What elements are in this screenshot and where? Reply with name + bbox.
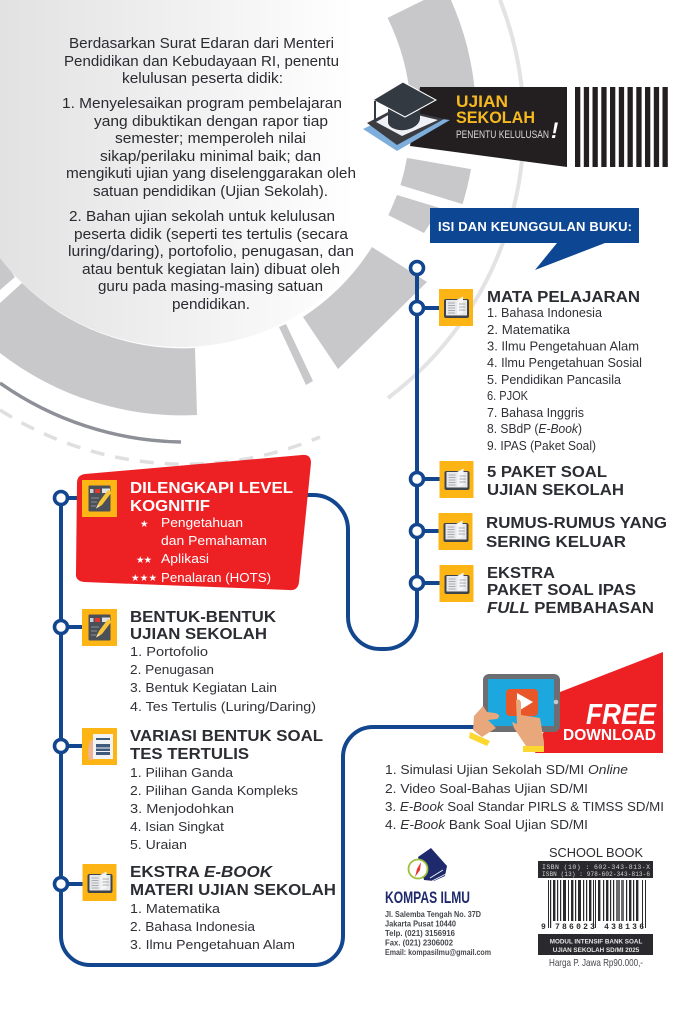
- list: 5. Uraian: [130, 837, 187, 852]
- cognitive level list: Aplikasi: [161, 551, 209, 566]
- cognitive level list: ★★: [136, 555, 152, 566]
- list: 1. Matematika: [130, 901, 221, 916]
- subject list: 5. Pendidikan Pancasila: [487, 372, 622, 387]
- timeline nodes: [54, 262, 424, 890]
- inner disc: [0, 0, 410, 347]
- intro text block: kelulusan peserta didik:: [122, 71, 283, 87]
- heading: FULL PEMBAHASAN: [487, 600, 654, 617]
- cognitive level list: [131, 515, 271, 585]
- subject list: 3. Ilmu Pengetahuan Alam: [487, 338, 639, 354]
- intro text block: satuan pendidikan (Ujian Sekolah).: [93, 184, 328, 200]
- exclamation mark: !: [551, 118, 558, 143]
- publisher address: [385, 910, 491, 957]
- heading: [130, 864, 336, 899]
- heading: PAKET SOAL IPAS: [487, 582, 636, 599]
- icon: book: [439, 289, 473, 326]
- intro text block: [62, 36, 356, 313]
- intro text block: mengikuti ujian yang diselenggarakan oleh: [66, 166, 356, 182]
- intro text block: atau bentuk kegiatan lain) dibuat oleh: [82, 262, 340, 278]
- tagline: PENENTU KELULUSAN: [456, 129, 549, 141]
- list: free download contents: 3. E-Book Soal Standar PIRLS & TIMSS SD/MI: [385, 799, 664, 814]
- connector stubs: [61, 308, 440, 884]
- cognitive level list: ★★★: [131, 573, 157, 584]
- connector line: left and bottom: [61, 498, 490, 965]
- intro text block: Pendidikan dan Kebudayaan RI, penentu: [64, 54, 339, 70]
- intro text block: guru pada masing-masing satuan: [98, 279, 323, 295]
- icon: pencil document: [82, 609, 117, 646]
- heading: MATA PELAJARAN: [487, 289, 640, 306]
- heading: TES TERTULIS: [130, 746, 249, 763]
- banner: ujian sekolah: [363, 82, 668, 167]
- heading: [130, 728, 323, 763]
- icon: pencil document: [82, 480, 117, 517]
- icon: hand holding table sheet: [82, 728, 117, 765]
- publisher address: Jl. Salemba Tengah No. 37D: [385, 910, 481, 919]
- list: free download contents: [385, 762, 664, 832]
- connector line: right and centre: [300, 268, 417, 649]
- barcode block: [538, 845, 653, 969]
- heading: UJIAN SEKOLAH: [487, 482, 624, 499]
- title box: UJIAN SEKOLAH SD/MI 2025: [553, 947, 640, 954]
- heading: ujian sekolah: UJIAN: [456, 93, 508, 111]
- intro text block: semester; memperoleh nilai: [115, 131, 306, 147]
- list: 2. Pilihan Ganda Kompleks: [130, 783, 299, 798]
- heading: KOGNITIF: [130, 498, 210, 515]
- barcode bars: [548, 880, 646, 928]
- list: 2. Bahasa Indonesia: [130, 919, 256, 934]
- heading: [487, 565, 654, 617]
- isbn box: ISBN (10) : 602-343-813-X: [542, 864, 650, 871]
- isbn box: ISBN (13) : 978-602-343-813-6: [542, 871, 650, 878]
- heading: BENTUK-BENTUK: [130, 609, 276, 626]
- title box: MODUL INTENSIF BANK SOAL: [550, 938, 642, 946]
- intro text block: sikap/perilaku minimal baik; dan: [100, 149, 321, 165]
- price: Harga P. Jawa Rp90.000,-: [549, 957, 643, 969]
- list: 1. Portofolio: [130, 644, 208, 659]
- heading: [486, 515, 667, 551]
- label: download: DOWNLOAD: [563, 727, 656, 744]
- list: [130, 901, 295, 952]
- callout: isi dan keunggulan buku: [430, 208, 639, 270]
- icon: book: [440, 461, 474, 498]
- list: free download contents: 4. E-Book Bank Soal Ujian SD/MI: [385, 817, 588, 832]
- heading: [487, 464, 624, 499]
- heading: EKSTRA E-BOOK: [130, 864, 274, 881]
- list: 3. Ilmu Pengetahuan Alam: [130, 937, 295, 952]
- subject list: 4. Ilmu Pengetahuan Sosial: [487, 355, 642, 370]
- subject list: 9. IPAS (Paket Soal): [487, 438, 596, 453]
- intro text block: 2. Bahan ujian sekolah untuk kelulusan: [69, 209, 335, 225]
- subject list: 2. Matematika: [487, 322, 571, 337]
- subject list: 8. SBdP (E-Book): [487, 421, 582, 436]
- heading: DILENGKAPI LEVEL: [130, 480, 293, 497]
- list: free download contents: 2. Video Soal-Bahas Ujian SD/MI: [385, 781, 588, 796]
- heading: VARIASI BENTUK SOAL: [130, 728, 323, 745]
- icon: book: [440, 565, 474, 602]
- title box: [538, 934, 653, 955]
- intro text block: pendidikan.: [172, 297, 250, 313]
- section: variasi bentuk soal: [82, 728, 323, 852]
- section: ekstra e-book: [82, 864, 336, 952]
- subject list: [487, 305, 642, 453]
- badge: free download: [469, 652, 663, 753]
- intro text block: 1. Menyelesaikan program pembelajaran: [62, 96, 342, 112]
- barcode digits: 9 786023 438136: [541, 923, 644, 932]
- subject list: 1. Bahasa Indonesia: [487, 305, 603, 320]
- icon: tablet with hands: [469, 674, 560, 752]
- cognitive level list: Penalaran (HOTS): [161, 570, 271, 585]
- isbn box: [538, 861, 653, 878]
- icon: graduation cap on book: [363, 82, 450, 151]
- list: 4. Isian Singkat: [130, 819, 224, 834]
- cognitive level list: Pengetahuan: [161, 515, 243, 530]
- publisher address: Email: kompasilmu@gmail.com: [385, 948, 491, 957]
- publisher address: Telp. (021) 3156916: [385, 929, 455, 938]
- heading: MATERI UJIAN SEKOLAH: [130, 882, 336, 899]
- intro text block: peserta didik (seperti tes tertulis (secara: [74, 227, 349, 243]
- intro text block: Berdasarkan Surat Edaran dari Menteri: [69, 36, 334, 52]
- decorative bars: [575, 87, 668, 167]
- panel: dilengkapi level kognitif: [76, 455, 311, 590]
- intro text block: luring/daring), portofolio, penugasan, dan: [68, 244, 354, 260]
- list: 3. Menjodohkan: [130, 801, 234, 816]
- heading: ujian sekolah: SEKOLAH: [456, 109, 535, 127]
- node: red panel: [54, 492, 68, 504]
- list: 4. Tes Tertulis (Luring/Daring): [130, 699, 316, 714]
- heading: SERING KELUAR: [486, 534, 626, 551]
- list: free download contents: 1. Simulasi Ujian Sekolah SD/MI Online: [385, 762, 628, 777]
- list: [130, 765, 299, 852]
- heading: [130, 609, 276, 643]
- publisher address: Fax. (021) 2306002: [385, 938, 453, 948]
- subject list: 6. PJOK: [487, 388, 528, 403]
- intro text block: yang dibuktikan dengan rapor tiap: [94, 114, 328, 130]
- heading: EKSTRA: [487, 565, 555, 582]
- heading: RUMUS-RUMUS YANG: [486, 515, 667, 532]
- label: free: FREE: [586, 699, 657, 731]
- section: mata pelajaran: [439, 289, 642, 453]
- icon: compass and book: [408, 848, 447, 881]
- list: [130, 644, 316, 714]
- label: school book: SCHOOL BOOK: [549, 845, 643, 860]
- callout: isi dan keunggulan buku: ISI DAN KEUNGGULAN BUKU:: [438, 219, 632, 234]
- section: 5 paket soal: [440, 461, 624, 499]
- heading: ujian sekolah: [456, 93, 535, 127]
- cognitive level list: dan Pemahaman: [161, 533, 267, 548]
- logo: kompas ilmu: [385, 848, 491, 957]
- icon: book: [438, 513, 472, 550]
- heading: [130, 480, 293, 515]
- heading: 5 PAKET SOAL: [487, 464, 607, 481]
- icon: book: [82, 864, 116, 901]
- list: 1. Pilihan Ganda: [130, 765, 234, 780]
- section: ekstra paket soal ipas: [440, 565, 654, 617]
- section: rumus-rumus: [438, 513, 667, 551]
- subject list: 7. Bahasa Inggris: [487, 405, 584, 420]
- list: 3. Bentuk Kegiatan Lain: [130, 680, 277, 695]
- logo wordmark: KOMPAS ILMU: [385, 888, 470, 907]
- section: bentuk-bentuk ujian sekolah: [82, 609, 316, 714]
- list: 2. Penugasan: [130, 662, 214, 677]
- publisher address: Jakarta Pusat 10440: [385, 920, 456, 928]
- heading: UJIAN SEKOLAH: [130, 626, 267, 643]
- cognitive level list: ★: [140, 519, 149, 530]
